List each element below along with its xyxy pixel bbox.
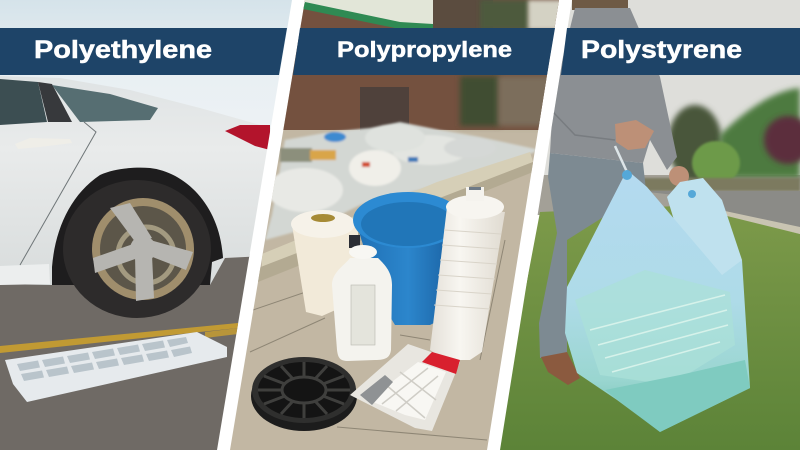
plastic bag [565,170,750,432]
yellow road line lower [205,328,238,338]
small blue [408,157,418,162]
front window [0,79,47,125]
tail light [225,125,270,150]
spoke up [110,203,152,243]
bucket rim [353,192,463,248]
sky [0,0,292,128]
bags back [365,124,425,152]
blue item [324,132,346,142]
blue bucket [353,192,463,325]
top sky [525,0,559,28]
bag strap [615,146,627,172]
asphalt ground [0,254,250,450]
window pillar [38,82,72,122]
hill green [720,88,800,178]
road [640,191,800,232]
tray cells [368,362,446,420]
bag knot 2 [688,190,696,198]
bottle body [332,258,392,361]
spoke right [150,240,193,270]
ice tray with red handle [350,344,460,431]
tray cell lines [382,368,438,418]
hair and beard [572,0,628,10]
bottle neck [466,187,484,201]
banner: polypropylene [293,28,555,75]
sweater [550,8,677,170]
black handle stub [349,235,360,248]
spoke down [135,255,154,301]
jug lid [311,214,335,222]
tray base [350,344,460,431]
container ribs [590,295,728,372]
pavement [220,0,570,450]
curb [725,211,800,234]
ledge side [258,162,533,282]
path behind person [495,175,800,215]
panel: polyethylene photo [0,0,300,450]
banner title: Polyethylene [34,36,212,64]
sign [303,0,433,26]
left hand [669,166,689,186]
top trees [480,0,530,30]
disc pocket [258,362,350,418]
tall white bottle [430,187,505,360]
right hand [615,120,654,150]
bag knot [622,170,632,180]
tree left [668,105,722,181]
panel: polystyrene photo [495,0,800,450]
bottle shoulder [446,195,504,219]
tire [63,180,211,318]
banner background [0,28,287,75]
jug body [292,222,358,316]
bag body [565,170,750,432]
bottle cap [349,245,377,259]
bucket inner [361,202,455,246]
bag fold [605,360,750,432]
boot [541,352,580,385]
bottle ribs [434,230,501,309]
bottle cap top [469,187,481,190]
tray body [5,332,227,402]
panel: polypropylene photo [220,0,570,450]
inner container [575,270,735,385]
sill [0,264,50,285]
pile of bags [265,122,540,240]
trees [460,76,500,126]
colored mix [280,148,312,162]
bag center [349,150,401,186]
door [360,87,409,133]
spokes [93,203,193,301]
building [283,0,559,130]
pavement joints [250,240,505,440]
yellow road lines [0,323,238,353]
rim interior [100,206,186,292]
rim [92,198,194,300]
hub [130,238,154,260]
tray gray insert [360,375,393,405]
red handle [422,352,460,374]
banner title: Polypropylene [337,37,512,62]
tray cells [17,337,192,381]
wheel arch [52,168,223,285]
rim inner ring [118,227,174,283]
banner background [293,28,555,75]
sign green stripe [303,2,433,28]
orange items [310,150,336,160]
purple tree [764,116,800,164]
sky [495,0,800,185]
disc base [251,361,357,431]
disc ribs [258,362,350,418]
bottle body [430,207,505,360]
hedge row [640,178,800,191]
plastic waste pile [265,122,540,240]
spoke left [93,244,135,273]
door handle [15,138,72,149]
banner: polyethylene [0,28,287,75]
car body [0,76,285,285]
ice tray [5,332,227,402]
concrete ledge [262,152,533,268]
disc top [252,357,356,423]
upper roof [433,0,493,30]
small white bottle [332,235,392,361]
label [351,285,375,345]
bucket body [356,205,460,325]
white jug [291,210,358,316]
jug top [291,210,355,238]
banner: polystyrene [561,28,800,75]
bags right [392,135,468,165]
distant building [498,76,558,126]
back bag handle [667,178,742,290]
jeans [539,153,646,358]
bush [692,141,740,185]
grass [495,205,800,450]
red item [362,162,370,167]
rear window [52,85,158,122]
black disc [251,357,357,431]
banner title: Polystyrene [581,36,742,64]
door line [20,122,96,265]
bags far right [444,138,496,158]
person [539,8,689,385]
arm shadow [553,112,615,140]
banner background [561,28,800,75]
mid bags [267,168,343,212]
